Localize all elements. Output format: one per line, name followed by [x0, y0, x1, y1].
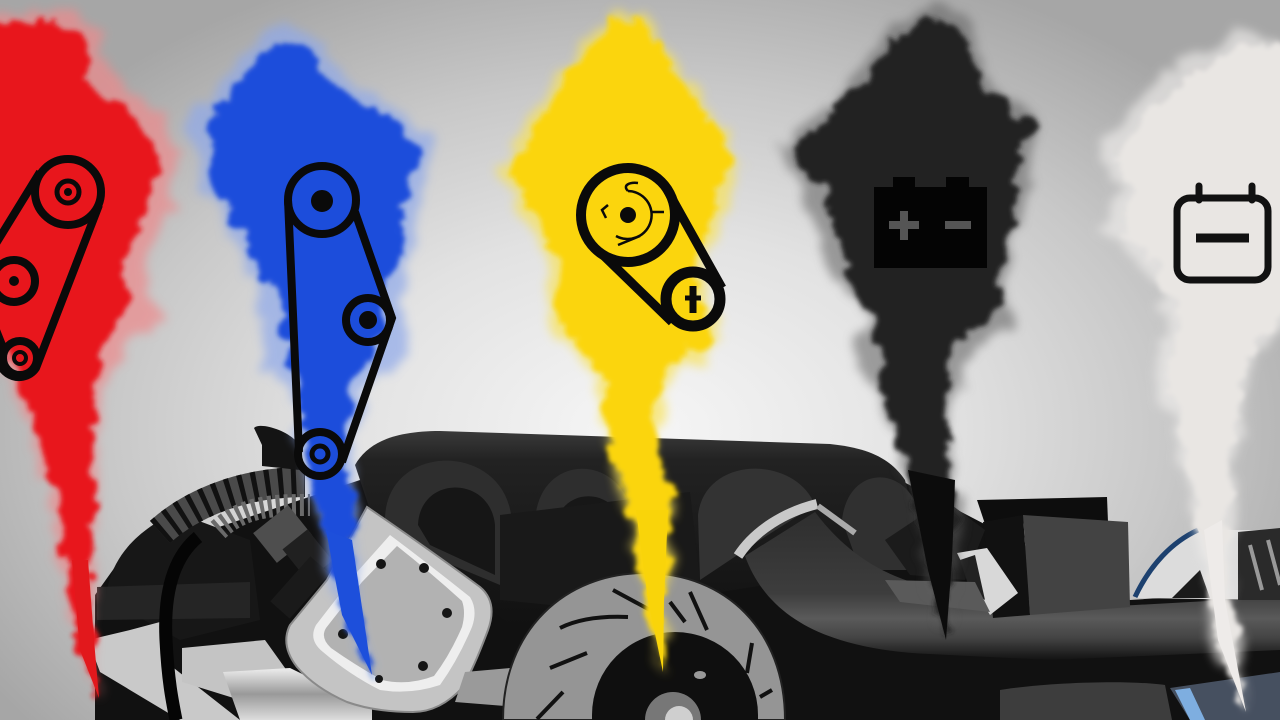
- belt outline: [0, 172, 99, 377]
- middle pulley: [346, 298, 390, 342]
- brake disc: [503, 573, 785, 720]
- black rubber tube: [108, 512, 260, 640]
- chrome bracket: [885, 500, 1018, 615]
- icon: solid black battery: [874, 177, 987, 268]
- smoke plume: black: [780, 8, 1046, 640]
- lower pulley: [3, 341, 37, 375]
- band: [97, 582, 250, 620]
- manifold runners: [385, 461, 918, 600]
- silver timing cover: [286, 507, 492, 712]
- icon: yellow broken belt: [581, 168, 722, 326]
- pipe clamp: [738, 504, 817, 556]
- engine base shadow mass: [95, 480, 1280, 720]
- lower pulley: [298, 432, 342, 476]
- middle pulley: [0, 260, 35, 302]
- lower bay: [1000, 672, 1280, 720]
- smoke plume: white: [1095, 30, 1280, 712]
- icon: blue serpentine belt: [288, 166, 392, 476]
- large intake pipe: [745, 512, 1280, 660]
- manifold bracket: [500, 492, 700, 612]
- large pulley: [581, 168, 675, 262]
- sensor cap: [254, 426, 300, 470]
- smoke plume: yellow: [496, 15, 746, 672]
- battery box: [977, 497, 1130, 618]
- intake manifold: [355, 431, 925, 625]
- icon: red serpentine belt: [0, 159, 101, 377]
- chrome exhaust: [88, 622, 372, 720]
- black hose loop: [166, 537, 198, 720]
- right side fan: [1135, 528, 1280, 600]
- smoke plume: red: [0, 10, 178, 700]
- icon: outlined battery: [1177, 186, 1268, 280]
- engine: [88, 426, 1280, 720]
- smoke plume: blue: [188, 27, 438, 675]
- belt outline: [604, 186, 722, 322]
- small pulley: [666, 272, 720, 326]
- corrugated hose: [160, 482, 320, 610]
- chrome pipe by disc: [455, 668, 510, 706]
- top pulley: [35, 159, 101, 225]
- belt outline: [288, 200, 392, 462]
- brake hub: [592, 632, 758, 720]
- top pulley: [288, 166, 356, 234]
